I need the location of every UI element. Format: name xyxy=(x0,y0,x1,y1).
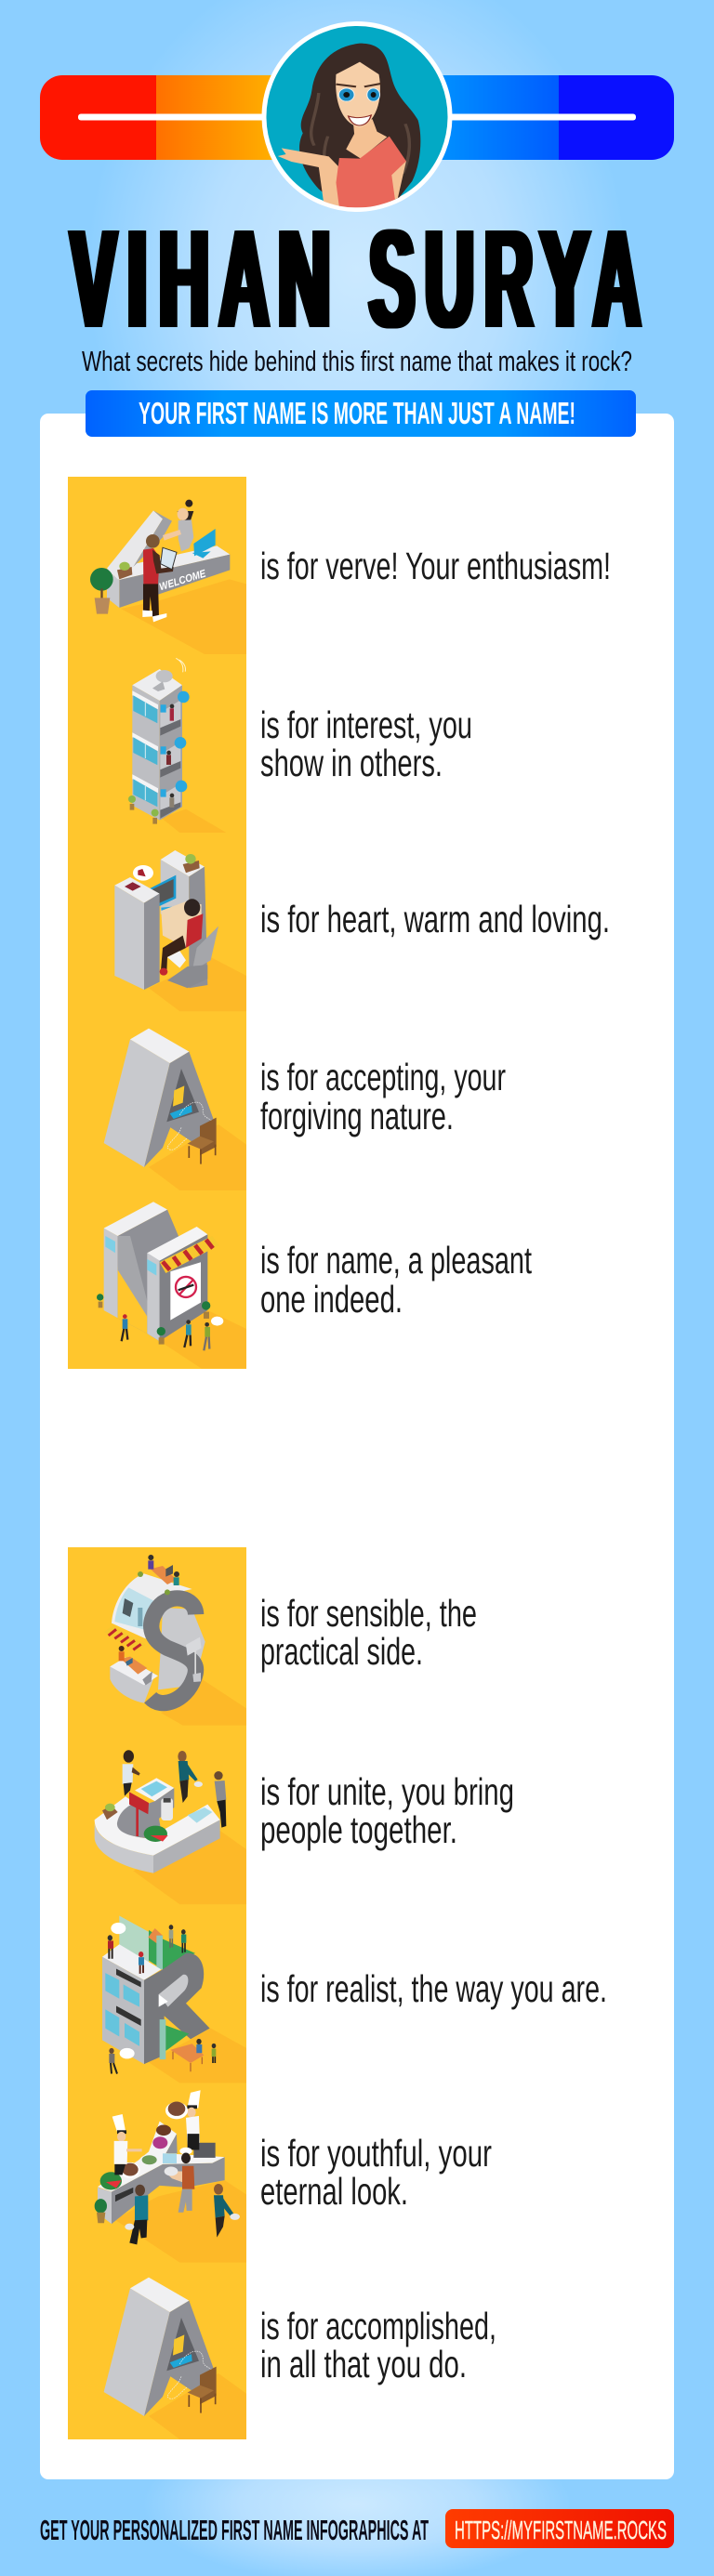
title: V xyxy=(71,200,116,357)
text: U lines xyxy=(260,1770,514,1851)
text: I lines: is for interest, you xyxy=(260,703,472,746)
icon: letter A chair (second) xyxy=(104,2278,246,2439)
text: A lines: forgiving nature. xyxy=(260,1095,454,1137)
text: A lines xyxy=(260,1056,506,1137)
panel: first name letters strip xyxy=(68,477,246,1369)
title xyxy=(67,200,642,357)
panel: white card xyxy=(40,414,674,2479)
title: Y xyxy=(540,200,589,357)
text: Y lines xyxy=(260,2132,492,2213)
text: Y lines: eternal look. xyxy=(260,2170,408,2213)
text: A lines: is for accepting, your xyxy=(260,1056,506,1098)
text: S lines xyxy=(260,1592,477,1673)
title: I xyxy=(127,200,147,357)
icon: letter I office tower xyxy=(128,658,226,833)
title: U xyxy=(425,200,474,357)
title: S xyxy=(369,200,415,357)
text: A lines second: in all that you do. xyxy=(260,2343,467,2385)
avatar: woman in circle xyxy=(264,24,450,210)
title: A xyxy=(219,200,269,357)
panel: last name letters strip xyxy=(68,1547,246,2439)
icon: letter U food counter xyxy=(95,1750,246,1904)
text: N lines xyxy=(260,1239,532,1321)
text: A lines second: is for accomplished, xyxy=(260,2305,496,2347)
icon: letter N no smoking building xyxy=(97,1202,246,1369)
text: I lines xyxy=(260,703,472,784)
footer link button xyxy=(445,2509,674,2548)
title: R xyxy=(484,200,533,357)
icon: letter V welcome desk xyxy=(90,500,246,654)
icon: letter S office xyxy=(104,1555,246,1726)
icon: letter Y buffet xyxy=(95,2090,246,2263)
title: H xyxy=(159,200,209,357)
icon: letter V welcome desk: WELCOME xyxy=(158,568,207,593)
text: N lines: is for name, a pleasant xyxy=(260,1239,532,1281)
text: U lines: is for unite, you bring xyxy=(260,1770,514,1813)
header ribbon xyxy=(40,75,674,160)
title: N xyxy=(278,200,330,357)
text: S lines: is for sensible, the xyxy=(260,1592,477,1635)
text: S lines: practical side. xyxy=(260,1630,423,1673)
icon: letter H study desk xyxy=(114,850,246,1011)
title: A xyxy=(593,200,641,357)
text: A lines second xyxy=(260,2305,496,2385)
text: I lines: show in others. xyxy=(260,742,443,784)
text: Y lines: is for youthful, your xyxy=(260,2132,492,2175)
icon: letter A chair xyxy=(104,1029,246,1190)
text: N lines: one indeed. xyxy=(260,1278,403,1321)
text: U lines: people together. xyxy=(260,1808,457,1851)
icon: letter R building xyxy=(102,1916,246,2083)
banner xyxy=(86,390,636,437)
